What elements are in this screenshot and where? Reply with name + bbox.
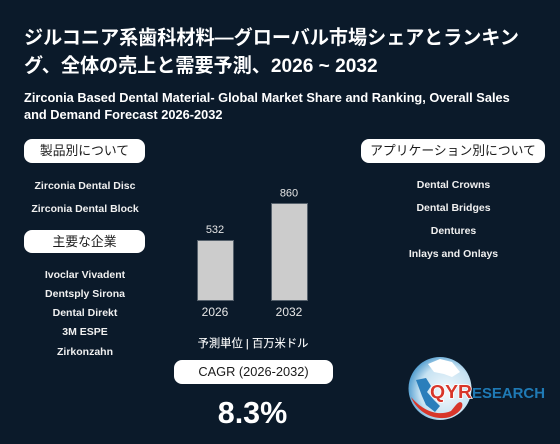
English subtitle bbox=[24, 90, 510, 122]
logo wordmark: QYR bbox=[430, 381, 472, 402]
bar 2032: 860 bbox=[280, 188, 298, 200]
application list bbox=[409, 179, 498, 260]
main title in Japanese: ジルコニア系歯科材料―グローバル市場シェアとランキン bbox=[24, 28, 519, 49]
forecast unit label: 予測単位 | 百万米ドル bbox=[198, 338, 308, 350]
main title in Japanese bbox=[24, 27, 519, 77]
English subtitle: Zirconia Based Dental Material- Global Market Share and Ranking, Overall Sales bbox=[24, 90, 510, 105]
application list: Dentures bbox=[431, 225, 476, 237]
application list: Dental Bridges bbox=[416, 202, 491, 214]
icon: globe bbox=[408, 357, 472, 420]
company list: Dentsply Sirona bbox=[45, 288, 125, 300]
CAGR value: 8.3% bbox=[218, 396, 287, 430]
company list: Dental Direkt bbox=[53, 307, 117, 319]
companies heading pill: 主要な企業 bbox=[52, 234, 116, 249]
CAGR pill bbox=[174, 360, 333, 384]
company list bbox=[45, 269, 126, 358]
CAGR pill: CAGR (2026-2032) bbox=[198, 364, 309, 379]
English subtitle: and Demand Forecast 2026-2032 bbox=[24, 106, 222, 122]
bar 2032 bbox=[272, 188, 308, 319]
company list: 3M ESPE bbox=[62, 326, 108, 338]
product list: Zirconia Dental Block bbox=[31, 202, 139, 214]
application heading pill: アプリケーション別について bbox=[370, 143, 536, 158]
company list: Zirkonzahn bbox=[57, 346, 113, 358]
product list bbox=[31, 180, 139, 214]
application list: Inlays and Onlays bbox=[409, 248, 498, 260]
company list: Ivoclar Vivadent bbox=[45, 269, 125, 281]
bar 2026: 532 bbox=[206, 224, 224, 236]
bar 2026: 2026 bbox=[202, 305, 229, 319]
product heading pill: 製品別について bbox=[40, 143, 129, 158]
bar 2026 bbox=[198, 224, 234, 319]
logo: QYResearch bbox=[408, 357, 545, 420]
application heading pill bbox=[361, 139, 545, 163]
product heading pill bbox=[24, 139, 145, 163]
logo wordmark: ESEARCH bbox=[472, 385, 545, 402]
companies heading pill bbox=[24, 230, 145, 253]
logo wordmark bbox=[430, 381, 545, 402]
application list: Dental Crowns bbox=[417, 179, 490, 191]
product list: Zirconia Dental Disc bbox=[35, 180, 135, 192]
main title in Japanese: グ、全体の売上と需要予測、2026 ~ 2032 bbox=[24, 56, 378, 77]
bar 2032: 2032 bbox=[276, 305, 303, 319]
bar chart bbox=[197, 188, 308, 319]
